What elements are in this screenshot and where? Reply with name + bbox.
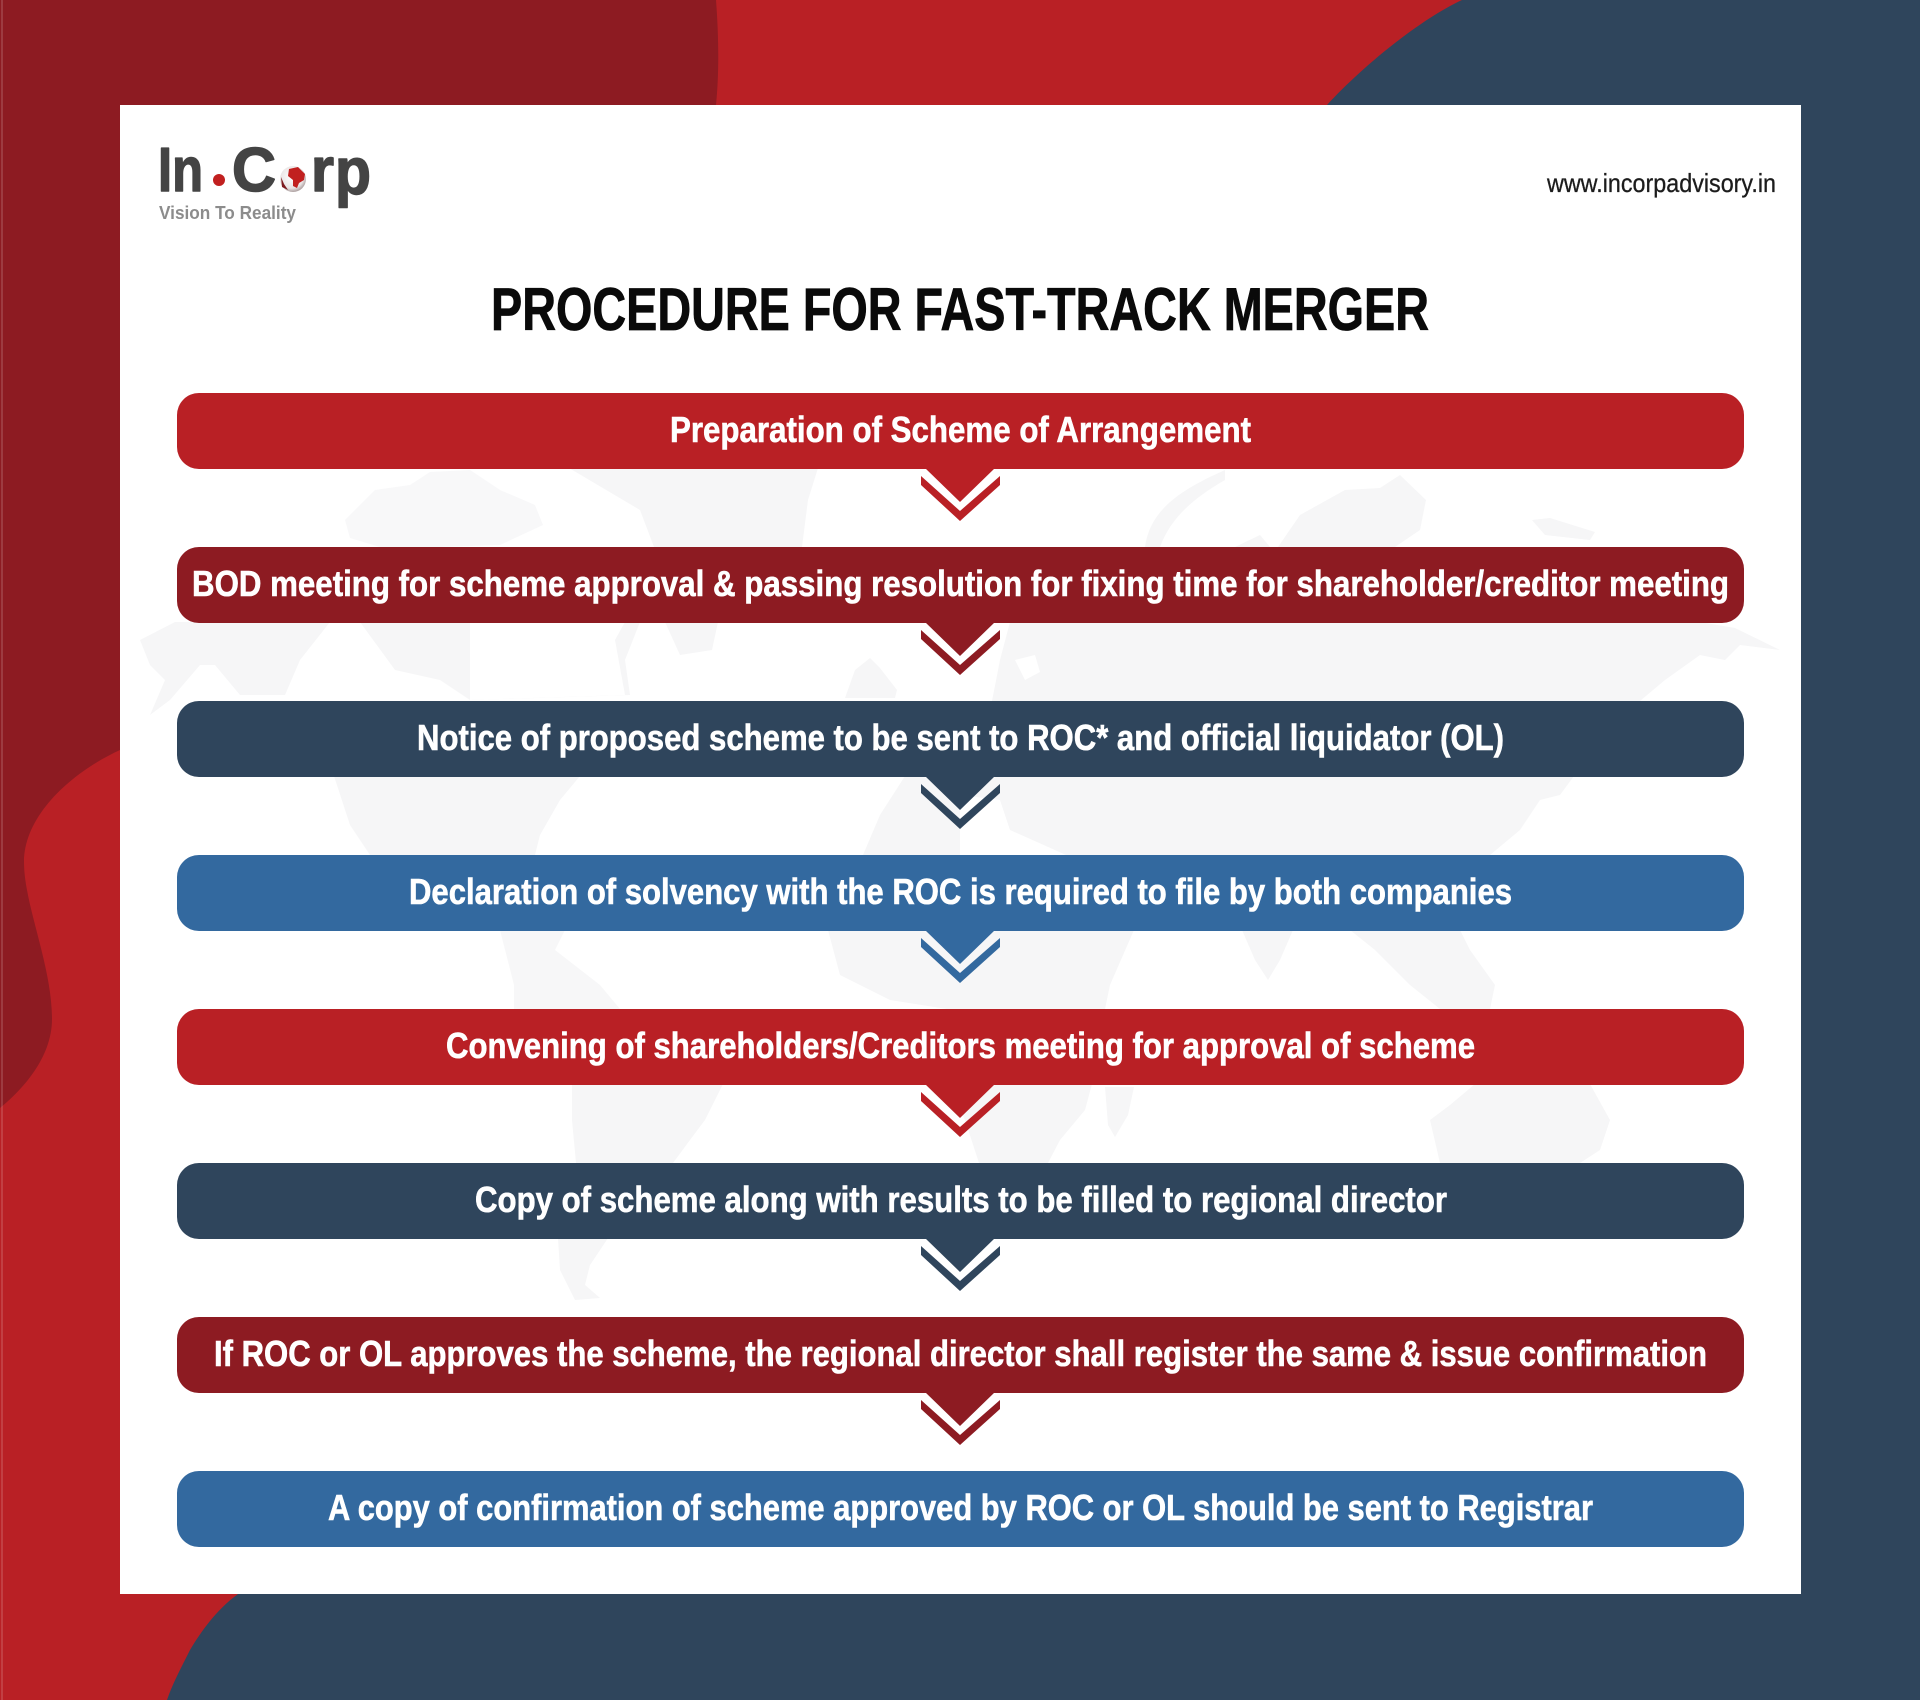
step 2 text: BOD meeting for scheme approval & passing resolution for fixing time for shareholder/creditor meeting	[192, 563, 1729, 604]
step 7	[177, 1317, 1744, 1445]
logo tagline: Vision To Reality	[159, 203, 296, 223]
step 1 bar	[177, 393, 1744, 469]
website url: www.incorpadvisory.in	[1546, 168, 1776, 198]
step 8 bar	[177, 1471, 1744, 1547]
step 5 arrow	[921, 1084, 1000, 1137]
logo wordmark: In: In	[158, 136, 203, 205]
step 6 text: Copy of scheme along with results to be filled to regional director	[475, 1179, 1447, 1220]
background: red swoosh top and left	[0, 0, 1462, 1700]
step 2	[177, 547, 1744, 675]
background: dark red blob	[0, 0, 718, 1108]
step 6 bar	[177, 1163, 1744, 1239]
step 5	[177, 1009, 1744, 1137]
logo red dot	[213, 174, 225, 186]
step 8 text: A copy of confirmation of scheme approved by ROC or OL should be sent to Registrar	[328, 1487, 1593, 1528]
step 2 arrow	[921, 622, 1000, 675]
step 4 text: Declaration of solvency with the ROC is required to file by both companies	[409, 871, 1512, 912]
step 2 bar	[177, 547, 1744, 623]
step 3	[177, 701, 1744, 829]
step 3 arrow	[921, 776, 1000, 829]
panel: white card	[120, 105, 1801, 1594]
logo globe	[280, 166, 306, 192]
step 7 arrow	[921, 1392, 1000, 1445]
logo wordmark: C: C	[232, 136, 276, 205]
step 1	[177, 393, 1744, 521]
step 5 bar	[177, 1009, 1744, 1085]
step 7 bar	[177, 1317, 1744, 1393]
step 7 text: If ROC or OL approves the scheme, the regional director shall register the same & issue confirmation	[214, 1333, 1707, 1374]
world map watermark	[140, 468, 1780, 1300]
logo wordmark: p: p	[335, 134, 371, 208]
step 8	[177, 1471, 1744, 1547]
step 5 text: Convening of shareholders/Creditors meeting for approval of scheme	[446, 1025, 1475, 1066]
background: left edge highlight	[1, 0, 3, 1700]
step 4	[177, 855, 1744, 983]
step 1 text: Preparation of Scheme of Arrangement	[670, 409, 1251, 450]
step 3 text: Notice of proposed scheme to be sent to ROC* and official liquidator (OL)	[417, 717, 1504, 758]
step 1 arrow	[921, 468, 1000, 521]
logo	[158, 134, 371, 223]
step 4 arrow	[921, 930, 1000, 983]
title: PROCEDURE FOR FAST-TRACK MERGER	[491, 276, 1429, 343]
step 4 bar	[177, 855, 1744, 931]
step 6	[177, 1163, 1744, 1291]
step 3 bar	[177, 701, 1744, 777]
logo wordmark: r: r	[311, 136, 334, 205]
step 6 arrow	[921, 1238, 1000, 1291]
